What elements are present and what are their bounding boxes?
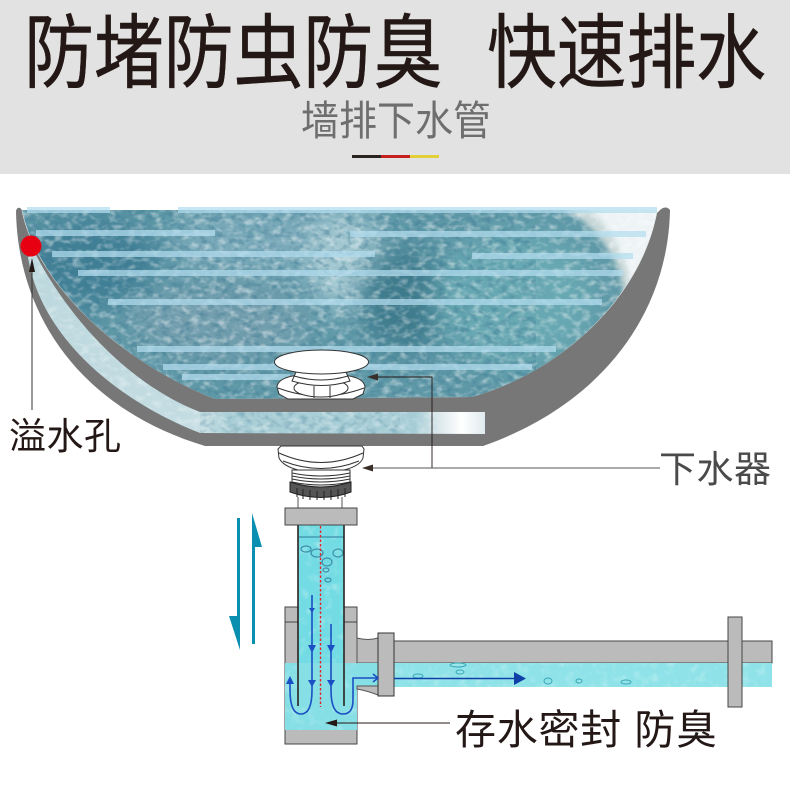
water surface stripes: [27, 207, 657, 380]
teal flow direction arrows: [229, 513, 262, 650]
trap water: [285, 663, 357, 730]
title: [24, 9, 766, 100]
basin cross-section: [16, 205, 670, 446]
water seal callout: [325, 707, 717, 753]
title: 快速排水: [487, 9, 766, 100]
tricolor divider: [352, 155, 439, 158]
lower drain fitting: [278, 446, 364, 508]
overflow callout: 溢水孔: [9, 416, 121, 457]
basin inner water: [16, 205, 666, 405]
vertical pipe with water: [298, 525, 344, 663]
water seal callout: 存水密封 防臭: [455, 707, 717, 753]
overflow hole marker: [20, 236, 42, 256]
blue flow arrows: [290, 595, 518, 714]
title: 防堵防虫防臭: [24, 9, 443, 100]
drain callout: 下水器: [659, 449, 771, 490]
basin cavity band: [20, 250, 485, 440]
horizontal pipe: [394, 641, 772, 663]
water specks: [413, 663, 631, 684]
pipe flanges: [378, 633, 394, 696]
header band: [0, 0, 790, 174]
drain callout: [362, 374, 771, 490]
S-trap pipe: [285, 508, 772, 744]
trap body: [285, 607, 357, 744]
subtitle: 墙排下水管: [301, 99, 491, 144]
upper pop-up drain plug: [274, 350, 368, 399]
basin gray shell: [16, 208, 670, 446]
red centre line: [320, 526, 322, 707]
overflow callout: [9, 258, 121, 457]
top flange: [285, 508, 357, 525]
outlet connector: [357, 638, 378, 663]
